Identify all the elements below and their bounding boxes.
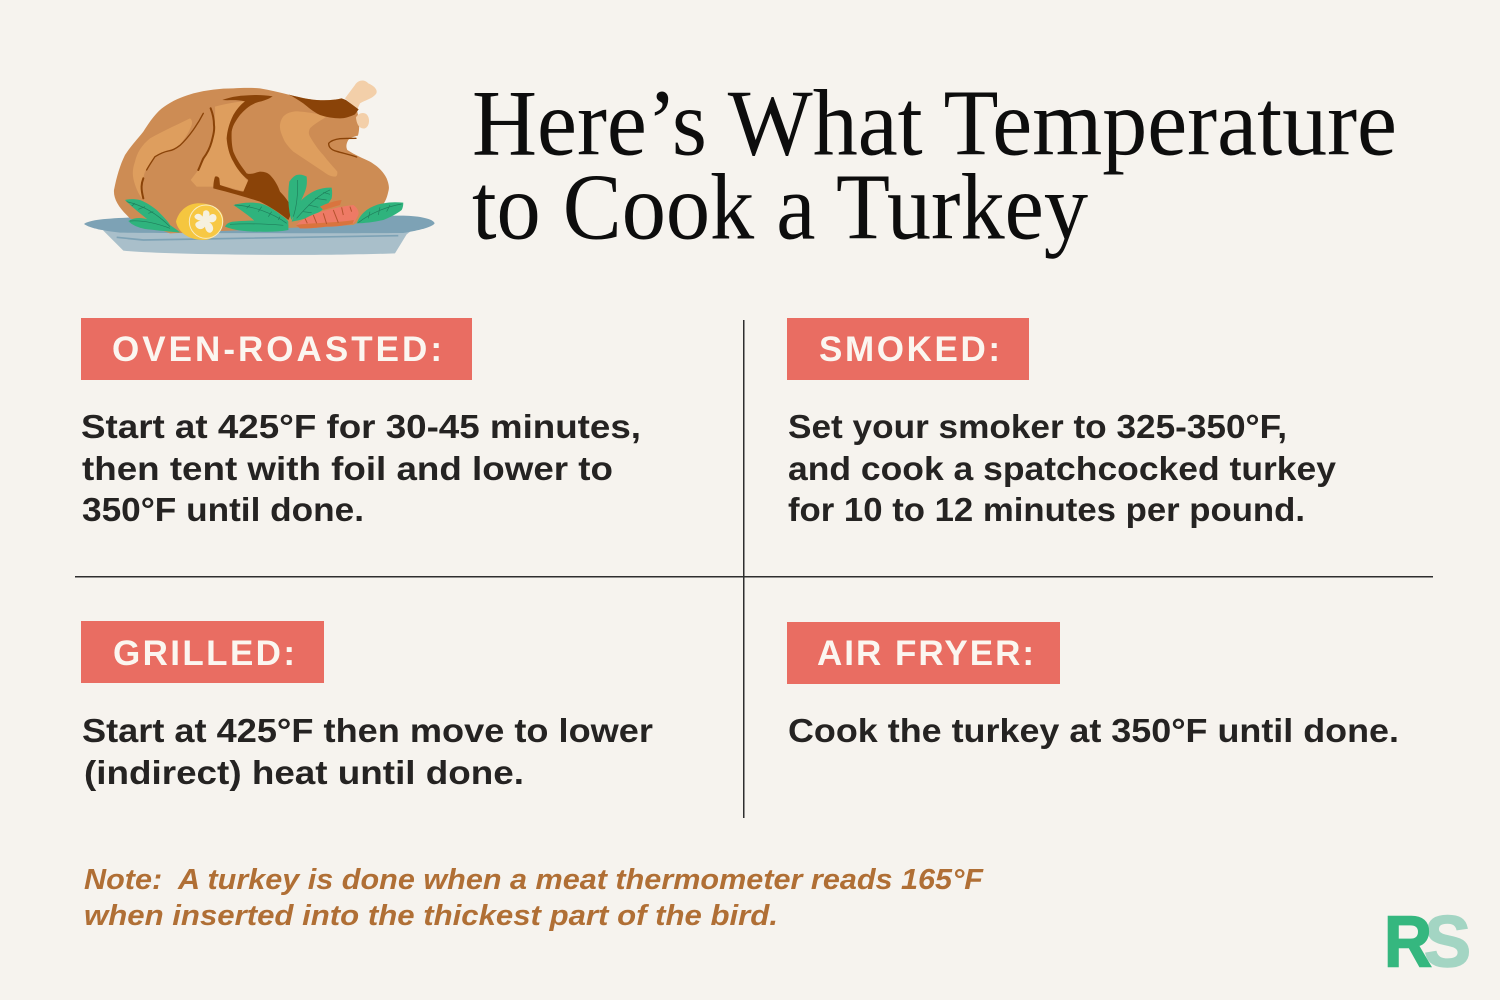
title: to Cook a Turkey (472, 156, 1088, 260)
panel: grilled (81, 621, 653, 792)
heading: smoked (787, 318, 1029, 380)
text: oven-roasted instructions (81, 409, 641, 529)
note: Note: A turkey is done when a meat thermometer reads 165°F (84, 864, 984, 896)
text: oven-roasted instructions: Start at 425°F for 30-45 minutes, (81, 409, 641, 446)
text: smoked instructions (788, 409, 1336, 529)
garnish: carrot (296, 200, 359, 228)
turkey highlights (133, 101, 337, 198)
text: air fryer instructions: Cook the turkey at 350°F until done. (788, 713, 1399, 750)
turkey creases (142, 108, 357, 198)
text: smoked instructions: Set your smoker to 325-350°F, (788, 409, 1287, 446)
garnish: leaves (125, 175, 403, 233)
turkey dark areas (213, 94, 359, 220)
text: oven-roasted instructions: then tent with foil and lower to (82, 451, 613, 488)
text: grilled instructions: (indirect) heat until done. (84, 755, 524, 792)
logo: RS: R (1384, 902, 1432, 982)
text: grilled instructions (82, 713, 653, 792)
heading: air fryer: AIR FRYER: (817, 634, 1034, 673)
heading: smoked: SMOKED: (819, 330, 1000, 369)
platter (84, 216, 435, 255)
turkey bones (345, 81, 377, 128)
illustration: roast turkey on a platter (84, 81, 435, 255)
horizontal divider (75, 576, 1433, 578)
heading: grilled: GRILLED: (113, 634, 295, 673)
heading: grilled (81, 621, 324, 683)
garnish: lemon slice (176, 203, 223, 240)
text: grilled instructions: Start at 425°F then move to lower (82, 713, 653, 750)
turkey body (114, 88, 389, 233)
text: smoked instructions: and cook a spatchcocked turkey (788, 451, 1336, 488)
title (472, 72, 1397, 260)
garnish: leaf veins (127, 180, 402, 228)
heading: oven-roasted: OVEN-ROASTED: (112, 330, 442, 369)
heading: air fryer (787, 622, 1060, 684)
logo: RS (1384, 902, 1471, 982)
text: smoked instructions: for 10 to 12 minutes per pound. (788, 492, 1305, 529)
logo: RS: S (1424, 902, 1471, 982)
panel: air fryer (787, 622, 1399, 750)
title: Here’s What Temperature (472, 72, 1397, 176)
panel: smoked (787, 318, 1336, 529)
note (84, 864, 984, 932)
vertical divider (743, 320, 744, 818)
panel: oven-roasted (81, 318, 641, 529)
note: when inserted into the thickest part of the bird. (84, 900, 778, 932)
heading: oven-roasted (81, 318, 472, 380)
text: oven-roasted instructions: 350°F until done. (82, 492, 364, 529)
